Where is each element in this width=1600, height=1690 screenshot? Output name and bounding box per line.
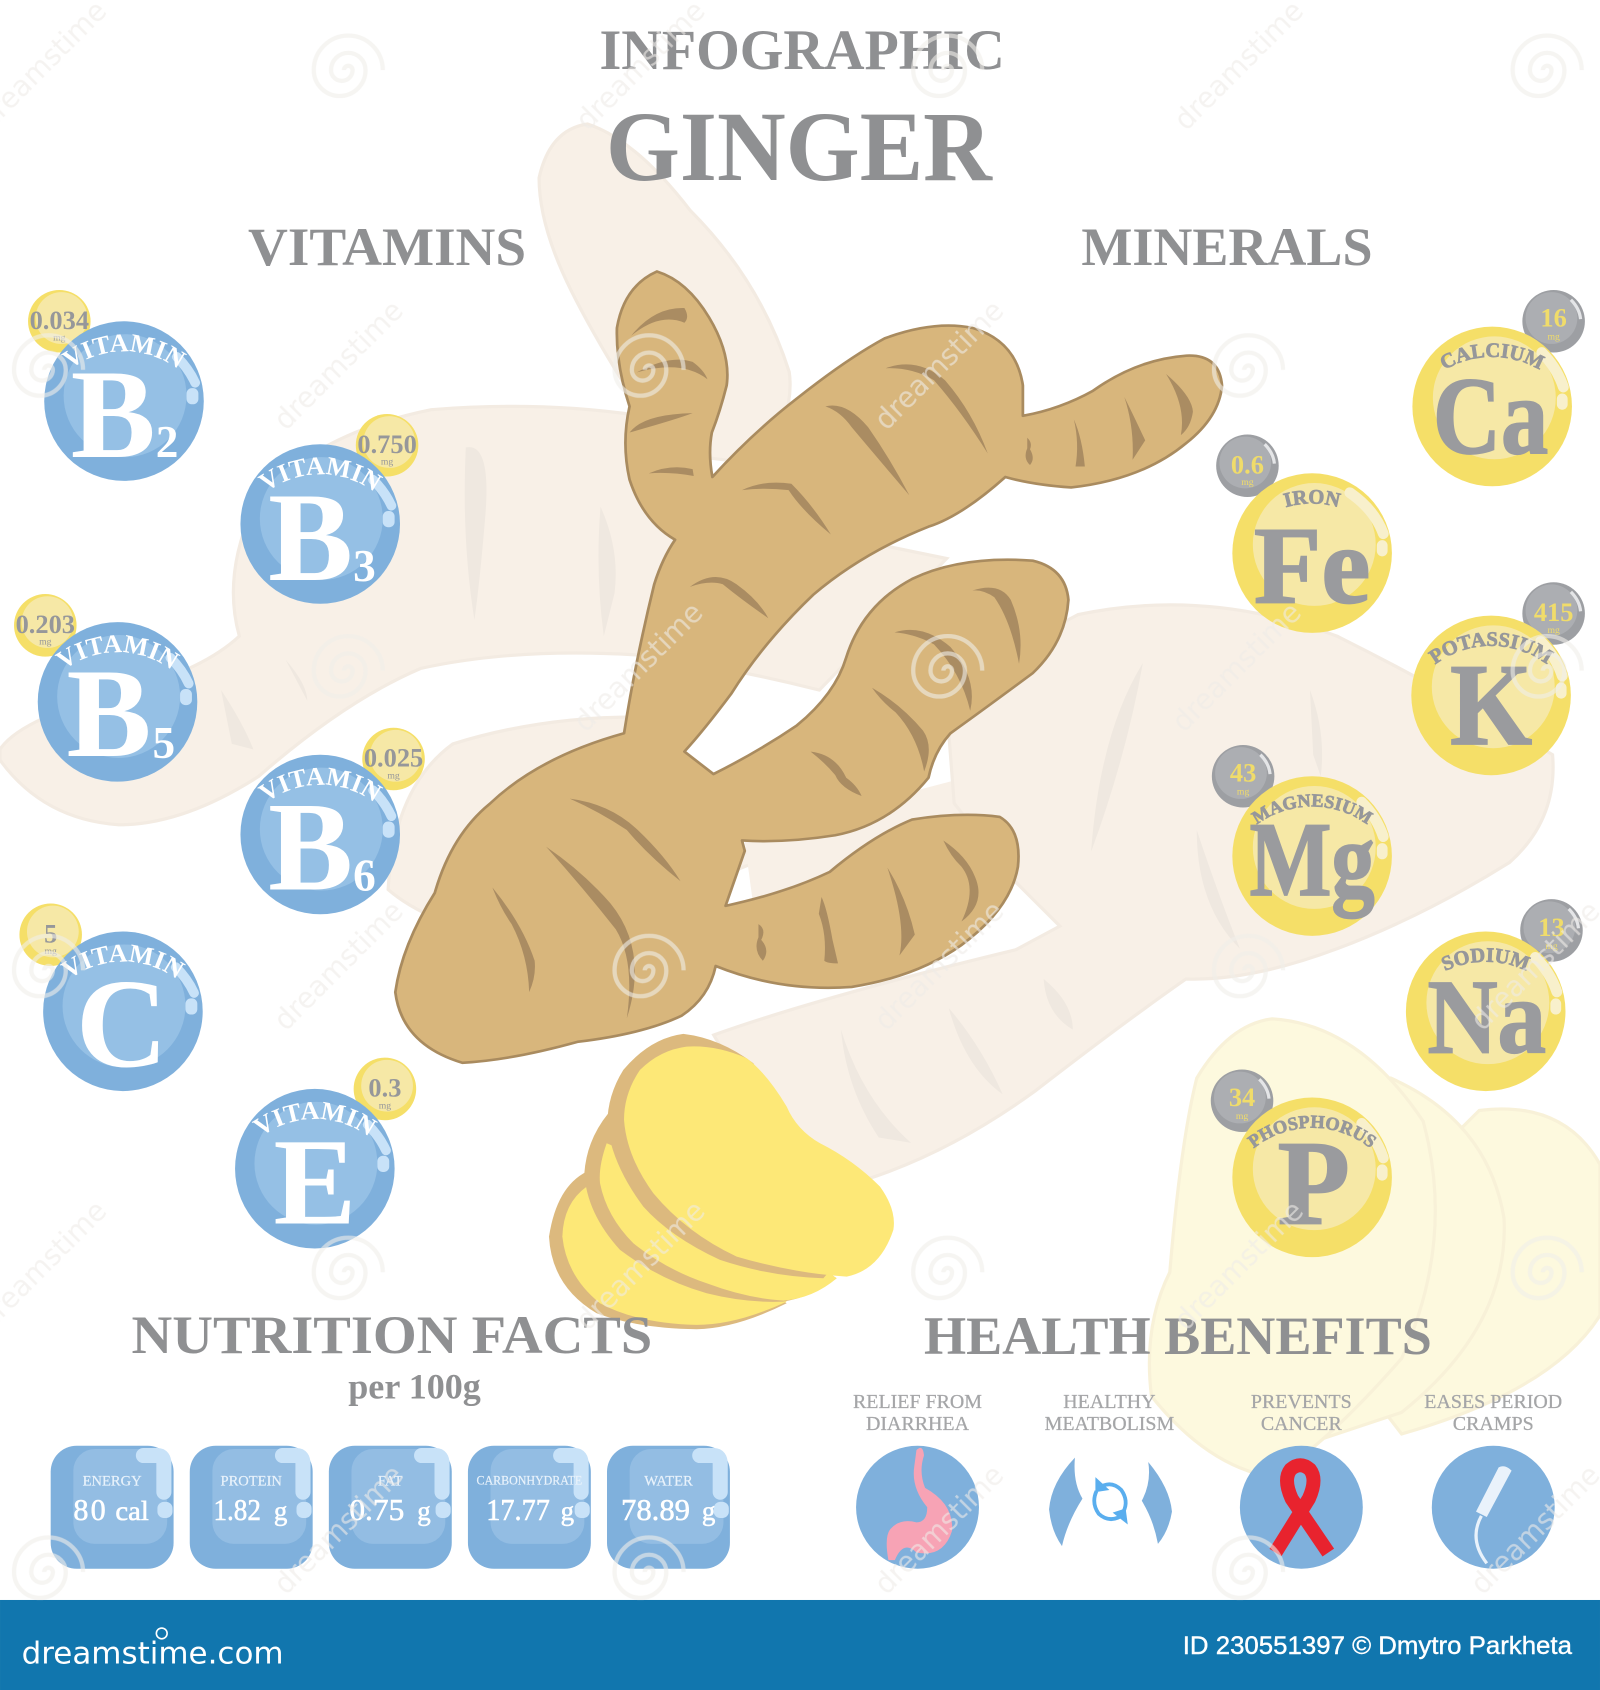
calcium bubble: Ca (1433, 355, 1548, 477)
vitamin B2 amount (28, 290, 91, 353)
vitamin C amount: mg (44, 946, 57, 957)
vitamin C bubble: VITAMIN (60, 944, 186, 978)
icon: tampon (1432, 1446, 1555, 1569)
nutrition tile: water: 78.89 (621, 1493, 690, 1527)
text: dreamstime (1165, 596, 1308, 738)
vitamin B6 amount: 0.025 (364, 743, 423, 773)
vitamin E bubble (235, 1088, 395, 1251)
calcium amount (1522, 290, 1585, 353)
nutrition tile: energy: ENERGY (83, 1474, 142, 1490)
iron amount: 0.6 (1231, 449, 1264, 479)
sodium amount: 13 (1538, 912, 1565, 942)
benefit label: eases period cramps: EASES PERIOD (1424, 1391, 1562, 1413)
phosphorus bubble: P (1278, 1117, 1350, 1251)
vitamin B3 bubble (240, 444, 400, 608)
heading: vitamins: VITAMINS (248, 217, 526, 277)
vitamin B5 bubble: B (66, 643, 151, 784)
benefit label: healthy metabolism: MEATBOLISM (1045, 1413, 1174, 1435)
benefit label: relief from diarrhea: DIARRHEA (866, 1413, 970, 1435)
calcium bubble: CALCIUM (1440, 343, 1546, 370)
vitamin B3 bubble: 3 (353, 541, 376, 591)
main heading: GINGER (606, 93, 993, 202)
vitamin C bubble (43, 932, 203, 1094)
potassium bubble: K (1450, 641, 1532, 770)
vitamin B6 bubble: B (268, 776, 353, 917)
nutrition tile: fat: g (417, 1496, 431, 1526)
text: dreamstime (267, 294, 410, 436)
magnesium bubble: MAGNESIUM (1250, 794, 1374, 825)
nutrition tile: water: g (702, 1496, 715, 1526)
vitamin B5 amount (14, 594, 77, 657)
sodium bubble (1406, 932, 1566, 1092)
vitamin B5 bubble: VITAMIN (54, 635, 180, 669)
nutrition tile: protein: PROTEIN (221, 1474, 282, 1490)
iron bubble: IRON (1282, 490, 1342, 508)
nutrition tile: fat (329, 1446, 452, 1569)
vitamin E amount: mg (379, 1100, 391, 1111)
subheading: per 100g: per 100g (348, 1366, 481, 1406)
magnesium bubble (1232, 776, 1392, 936)
vitamin C bubble: C (76, 953, 168, 1094)
text: dreamstime (868, 894, 1010, 1037)
vitamin E amount: 0.3 (368, 1072, 401, 1102)
phosphorus amount: 34 (1229, 1082, 1255, 1112)
vitamin B5 bubble: 5 (153, 718, 175, 768)
magnesium amount: 43 (1230, 758, 1256, 788)
nutrition tile: fat: 0.75 (349, 1493, 404, 1527)
calcium amount: 16 (1540, 303, 1567, 333)
benefit label: healthy metabolism: HEALTHY (1063, 1391, 1156, 1413)
text: dreamstime (1168, 1194, 1310, 1336)
text: dreamstime (567, 596, 709, 738)
vitamin B3 amount: 0.750 (357, 429, 417, 459)
text: dreamstime (868, 1458, 1010, 1601)
magnesium amount (1212, 745, 1274, 808)
faded background chips (1149, 1019, 1600, 1477)
heading: nutrition facts: NUTRITION FACTS (132, 1305, 652, 1365)
iron amount: mg (1241, 477, 1254, 488)
calcium bubble (1412, 326, 1572, 486)
text: dreamstime (868, 294, 1010, 436)
vitamin B2 bubble: VITAMIN (61, 334, 187, 368)
faded background ginger (0, 124, 1553, 1181)
icon: stomach (856, 1446, 979, 1569)
nutrition tile: carbohydrate (468, 1446, 591, 1569)
nutrition tile: water (607, 1446, 730, 1569)
sodium amount (1520, 899, 1583, 962)
vitamin B3 bubble: VITAMIN (257, 457, 384, 491)
vitamin B5 bubble (38, 622, 198, 784)
benefit label: prevents cancer: CANCER (1261, 1413, 1342, 1435)
vitamin B3 amount: mg (381, 457, 393, 468)
magnesium amount: mg (1237, 787, 1249, 798)
vitamin B5 amount: 0.203 (16, 609, 75, 639)
vitamin B6 bubble: VITAMIN (257, 768, 384, 802)
iron bubble (1232, 473, 1392, 633)
iron bubble: Fe (1254, 505, 1370, 627)
phosphorus bubble: PHOSPHORUS (1246, 1115, 1377, 1148)
nutrition tile: carbohydrate: g (561, 1496, 574, 1526)
potassium bubble: POTASSIUM (1427, 632, 1554, 665)
icon: metabolism (1049, 1458, 1172, 1546)
vitamin B6 amount: mg (387, 770, 400, 781)
vitamin E bubble: E (273, 1114, 356, 1251)
vitamin B2 bubble (44, 321, 204, 485)
heading: minerals: MINERALS (1081, 217, 1372, 277)
nutrition tile: carbohydrate: 17.77 (486, 1493, 550, 1527)
vitamin E amount (354, 1058, 416, 1120)
potassium amount (1522, 582, 1585, 645)
vitamin E bubble: VITAMIN (252, 1102, 378, 1136)
vitamin B6 bubble (240, 754, 400, 917)
nutrition tile: energy: 80 (73, 1493, 106, 1527)
icon: cancer ribbon (1240, 1446, 1363, 1569)
vitamin B5 amount: mg (39, 637, 52, 648)
sodium amount: mg (1545, 941, 1558, 952)
sodium bubble: SODIUM (1441, 948, 1532, 971)
magnesium bubble: Mg (1250, 801, 1375, 918)
nutrition tile: carbohydrate: CARBONHYDRATE (477, 1473, 582, 1488)
nutrition tile: protein: 1.82 (213, 1493, 261, 1527)
illustration: ginger root (395, 271, 1222, 1063)
nutrition tile: energy: cal (115, 1496, 149, 1526)
sodium bubble: Na (1427, 958, 1546, 1075)
footer bar: dreamstime.com (22, 1637, 284, 1672)
nutrition tile: energy (51, 1446, 174, 1569)
vitamin B2 amount: 0.034 (30, 305, 89, 335)
text: dreamstime (267, 1458, 410, 1601)
potassium bubble (1411, 616, 1571, 776)
iron amount (1216, 434, 1279, 497)
footer bar (0, 1600, 1600, 1690)
nutrition tile: water: WATER (644, 1474, 693, 1490)
phosphorus bubble (1232, 1098, 1392, 1258)
benefit label: relief from diarrhea: RELIEF FROM (853, 1391, 982, 1413)
nutrition tile: protein: g (274, 1496, 287, 1526)
vitamin B2 bubble: B (71, 344, 156, 485)
text: dreamstime (569, 1194, 712, 1336)
text: dreamstime (267, 894, 410, 1037)
calcium amount: mg (1547, 332, 1560, 343)
footer bar: ID 230551397 © Dmytro Parkheta (1183, 1633, 1572, 1660)
nutrition tile: protein (190, 1446, 313, 1569)
heading: health benefits: HEALTH BENEFITS (924, 1306, 1432, 1366)
benefit label: eases period cramps: CRAMPS (1453, 1413, 1534, 1435)
vitamin B2 bubble: 2 (156, 417, 178, 467)
vitamin B6 amount (362, 728, 425, 790)
vitamin B6 bubble: 6 (353, 851, 376, 901)
phosphorus amount (1211, 1070, 1273, 1132)
vitamin B3 bubble: B (268, 467, 353, 608)
potassium amount: 415 (1534, 597, 1573, 627)
nutrition tile: fat: FAT (378, 1474, 403, 1490)
vitamin C amount (19, 903, 82, 966)
phosphorus amount: mg (1236, 1111, 1248, 1122)
illustration: ginger slices (549, 1034, 894, 1329)
vitamin B3 amount (356, 414, 418, 477)
title: INFOGRAPHIC (599, 19, 1005, 82)
vitamin B2 amount: mg (53, 333, 66, 344)
vitamin C amount: 5 (44, 918, 57, 948)
benefit label: prevents cancer: PREVENTS (1251, 1391, 1352, 1413)
potassium amount: mg (1547, 625, 1560, 636)
faded background ginger stripes (221, 447, 1322, 1143)
